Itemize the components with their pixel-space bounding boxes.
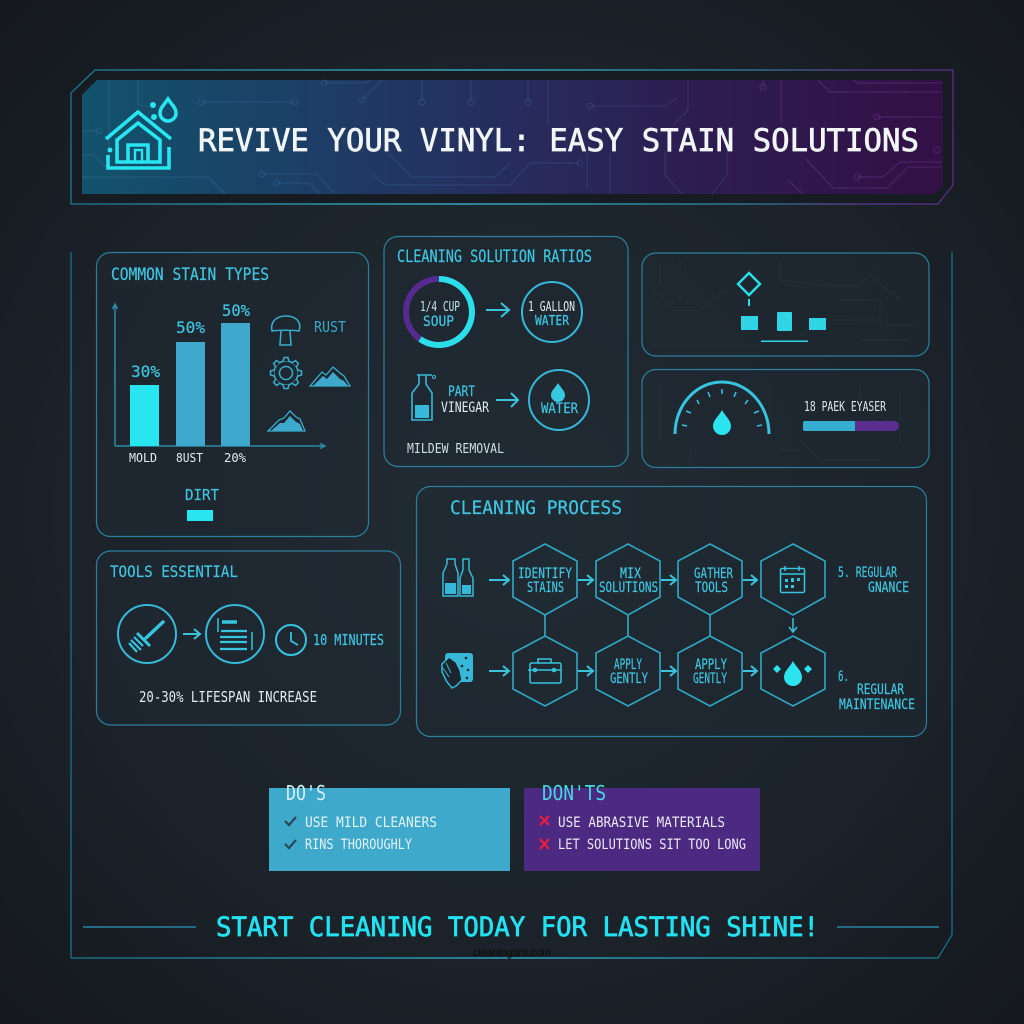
circle: water: WATER xyxy=(541,401,578,417)
header circuit pattern left xyxy=(82,80,727,194)
icon: glove and sponge xyxy=(442,653,473,688)
heading: tools essential: TOOLS ESSENTIAL xyxy=(110,562,238,581)
heading: do's: DO'S xyxy=(286,781,326,805)
icon: mountain xyxy=(310,367,350,386)
do item one: USE MILD CLEANERS xyxy=(305,815,437,831)
icon: diamond xyxy=(738,273,760,295)
call to action: START CLEANING TODAY FOR LASTING SHINE! xyxy=(216,912,819,943)
connector xyxy=(748,299,750,306)
step five label xyxy=(838,565,909,596)
faint circuits xyxy=(660,385,900,465)
don't item two: LET SOLUTIONS SIT TOO LONG xyxy=(558,837,746,853)
panel: cleaning solution ratios xyxy=(384,236,628,466)
step: apply gently: APPLY xyxy=(614,657,642,673)
step six label: MAINTENANCE xyxy=(839,697,915,713)
hexagon connectors xyxy=(545,615,710,636)
step: apply gently: GENTLY xyxy=(610,671,648,687)
header gradient band xyxy=(82,80,943,194)
ring: soap ratio: SOUP xyxy=(423,314,454,330)
ten minutes label: 10 MINUTES xyxy=(313,631,384,649)
part vinegar label: VINEGAR xyxy=(441,400,489,416)
step: water drop xyxy=(761,636,825,706)
step: apply gently second: APPLY xyxy=(695,657,727,673)
bar chart: 50% xyxy=(176,318,205,337)
circle: gallon water xyxy=(522,282,582,342)
faint circuits xyxy=(650,260,915,345)
don't item one: USE ABRASIVE MATERIALS xyxy=(558,815,725,831)
gauge dial xyxy=(675,382,769,435)
source credit: cleaningbro.com xyxy=(473,947,551,959)
step: mix solutions: SOLUTIONS xyxy=(599,580,658,596)
progress bar xyxy=(803,421,899,431)
panel: gauge xyxy=(642,370,929,468)
part vinegar label: PART xyxy=(448,384,475,400)
step: calendar xyxy=(761,544,825,615)
icon: mushroom xyxy=(272,316,300,345)
step: apply gently second: GENTLY xyxy=(693,671,727,687)
icon: mountain small xyxy=(268,411,305,431)
heading: cleaning process: CLEANING PROCESS xyxy=(450,498,622,519)
icon: house with water drop xyxy=(106,99,176,168)
panel: tools essential xyxy=(96,551,400,725)
rust label: RUST xyxy=(314,318,346,336)
panel: common stain types xyxy=(96,252,368,536)
ring: soap ratio xyxy=(406,279,472,345)
heading: don'ts: DON'TS xyxy=(542,781,606,805)
process arrows xyxy=(489,575,797,676)
icon: clock xyxy=(276,625,306,655)
icon: gear xyxy=(270,358,302,388)
step six label: REGULAR xyxy=(857,682,904,698)
arrow xyxy=(496,393,518,407)
step: mix solutions: MIX xyxy=(620,566,641,582)
arrow xyxy=(183,629,200,639)
circle: gallon water: 1 GALLON xyxy=(528,300,575,315)
panel: cleaning process xyxy=(416,486,926,736)
heading: common stain types: COMMON STAIN TYPES xyxy=(111,265,269,284)
lifespan stat: 20-30% LIFESPAN INCREASE xyxy=(139,688,317,706)
icon: spray bottle xyxy=(412,375,436,420)
header circuit pattern right xyxy=(760,80,942,194)
bar chart: MOLD xyxy=(129,451,157,465)
header frame xyxy=(71,70,953,204)
icon: brush circle xyxy=(118,605,176,663)
bar chart: 20% xyxy=(224,451,247,465)
step: identify stains: STAINS xyxy=(527,580,564,596)
circle: gallon water: WATER xyxy=(535,314,569,329)
step: gather tools xyxy=(678,544,742,615)
main frame xyxy=(71,252,952,958)
step: gather tools: TOOLS xyxy=(695,580,728,596)
step: identify stains xyxy=(513,544,577,615)
gauge label: 18 PAEK EYASER xyxy=(804,400,886,415)
part vinegar label xyxy=(441,384,489,416)
step: toolbox xyxy=(513,636,577,706)
arrow xyxy=(486,303,509,317)
panel: flow diagram xyxy=(642,253,929,356)
panel: don'ts xyxy=(524,781,760,871)
step: gather tools: GATHER xyxy=(694,566,733,582)
step: apply gently xyxy=(596,636,660,706)
step five label: 5. REGULAR xyxy=(838,565,897,581)
heading: cleaning solution ratios: CLEANING SOLUTION RATIOS xyxy=(397,247,592,266)
step six label xyxy=(838,669,915,713)
bar chart: 30% xyxy=(131,362,160,381)
step: mix solutions xyxy=(596,544,660,615)
dirt swatch xyxy=(187,510,213,521)
panel: do's xyxy=(269,781,510,871)
ring: soap ratio: 1/4 CUP xyxy=(420,299,460,315)
bar chart xyxy=(112,301,325,465)
do item two: RINS THOROUGHLY xyxy=(305,837,412,853)
dirt label: DIRT xyxy=(185,486,219,504)
mildew removal label: MILDEW REMOVAL xyxy=(407,442,504,457)
header banner xyxy=(71,70,953,204)
step five label: GNANCE xyxy=(868,580,909,596)
circle: water xyxy=(529,370,589,430)
icon: hose circle xyxy=(206,605,264,663)
bar chart: 8UST xyxy=(176,451,203,465)
step: identify stains: IDENTIFY xyxy=(518,566,572,582)
bar chart: 50% xyxy=(222,301,250,320)
step six label: 6. xyxy=(838,669,849,685)
title: REVIVE YOUR VINYL: EASY STAIN SOLUTIONS xyxy=(198,123,919,159)
block cluster xyxy=(741,312,826,342)
step: apply gently second xyxy=(678,636,742,706)
icon: bottles xyxy=(443,559,473,596)
